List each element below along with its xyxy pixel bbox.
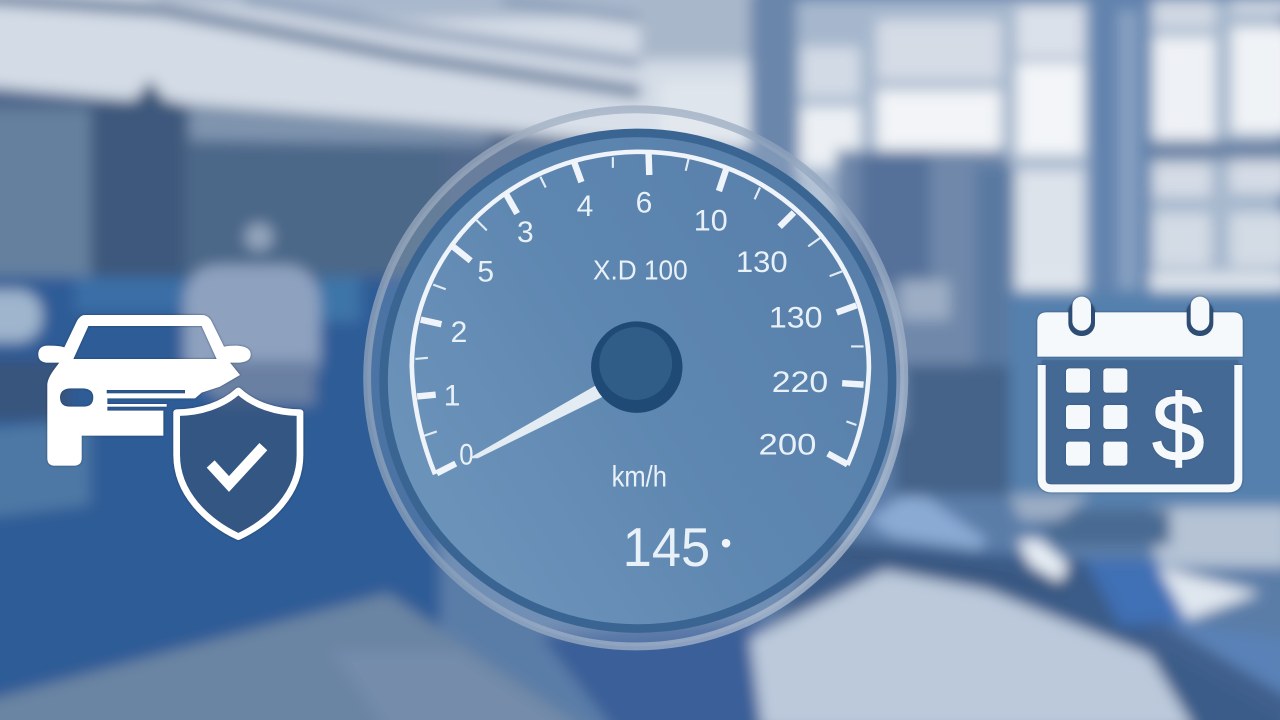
dial face [384, 133, 892, 629]
scale numbers: 130 [769, 302, 823, 335]
calendar body outline [1042, 365, 1238, 488]
calendar header [1037, 312, 1243, 357]
glass outer ring [367, 109, 904, 646]
scale numbers: 10 [694, 204, 728, 237]
calendar right ring [1187, 297, 1213, 336]
left wall [0, 87, 700, 300]
person [245, 223, 273, 251]
columns [750, 0, 797, 175]
icon: calendar with dollar [1037, 297, 1243, 488]
scale numbers: 1 [444, 379, 460, 412]
needle [469, 385, 607, 458]
floor left [0, 593, 620, 720]
icon: shield outline [177, 391, 300, 537]
scale numbers: 5 [477, 255, 494, 288]
unit label: km/h [612, 460, 667, 493]
dollar sign: $ [1152, 375, 1205, 481]
major ticks [417, 154, 864, 473]
scale numbers: 220 [772, 366, 828, 399]
readout dot [722, 539, 730, 548]
minor ticks [415, 157, 864, 436]
scale numbers [444, 187, 828, 471]
icon: car [38, 315, 251, 466]
calendar left ring [1068, 297, 1095, 336]
scale numbers: 0 [459, 438, 474, 471]
needle hub [591, 321, 683, 413]
icon: car with protection shield [38, 315, 300, 537]
speedometer gauge [367, 109, 904, 646]
scale numbers: 6 [636, 187, 652, 220]
floor right [1154, 507, 1280, 567]
icon: check mark [211, 447, 263, 484]
scale numbers: 200 [759, 428, 816, 461]
scale numbers: 4 [577, 190, 593, 223]
calendar date squares [1066, 368, 1127, 466]
scale numbers: 2 [451, 316, 467, 349]
speed readout: 145 [623, 516, 710, 578]
scale numbers: 3 [517, 216, 534, 249]
ceiling and beams [0, 0, 760, 150]
calendar page fill [1042, 360, 1238, 488]
windows right [797, 0, 1089, 292]
machinery [836, 150, 1007, 370]
scale arc [412, 152, 869, 474]
model label: X.D 100 [593, 254, 688, 285]
blue zone [0, 277, 440, 707]
scale numbers: 130 [736, 246, 788, 279]
